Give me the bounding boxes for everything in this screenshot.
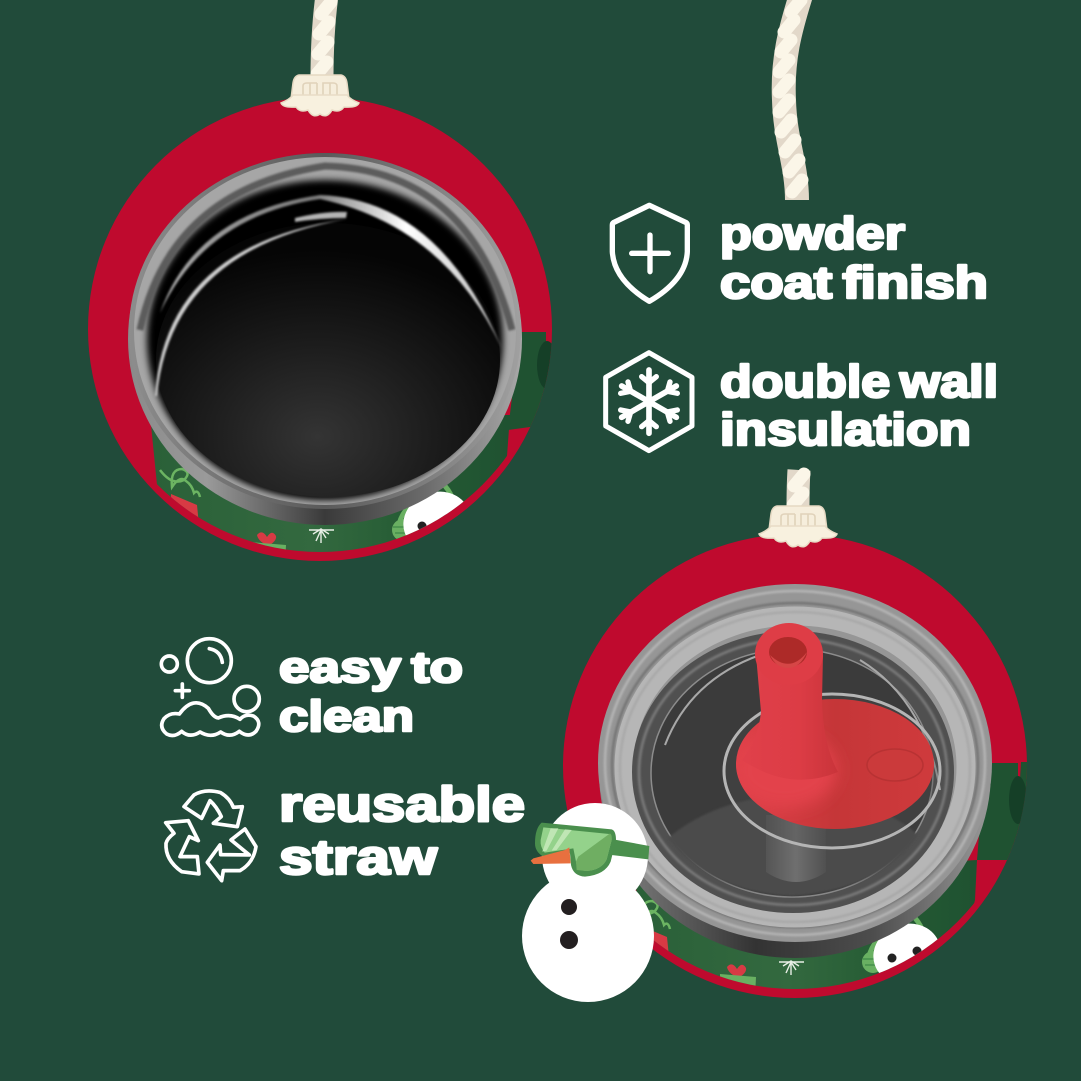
heading: easy to clean: clean: [279, 692, 414, 741]
ornament red ball: [88, 97, 552, 561]
snowman buttons: [560, 899, 578, 949]
heading: double wall insulation: [720, 356, 998, 455]
ornament: lid with red straw top view: [563, 534, 1030, 1011]
metal rim: [128, 153, 522, 525]
heading: powder coat finish: [720, 208, 988, 308]
heading: reusable straw: reusable: [279, 778, 525, 832]
clear ring around disc: [724, 694, 940, 848]
rope: left ornament: [317, 0, 331, 78]
clear lid ring: [598, 584, 992, 942]
feature: powder coat finish: [612, 205, 988, 308]
patterned green band: [636, 860, 977, 989]
heading: reusable straw: straw: [279, 831, 438, 885]
icon: recycle arrows: [166, 791, 256, 881]
patterned green band: [151, 415, 510, 552]
heading: easy to clean: [279, 643, 463, 741]
rope: right ornament: [793, 470, 804, 510]
tumbler handle: [977, 762, 1030, 860]
heading: double wall insulation: double wall: [720, 356, 998, 407]
feature: double wall insulation: [606, 353, 998, 455]
feature: easy to clean: [161, 639, 463, 741]
heading: powder coat finish: powder: [720, 208, 905, 259]
icon: shield with plus: [612, 205, 687, 301]
ornament red ball: [563, 534, 1027, 998]
ornament cap: left: [281, 75, 359, 116]
heading: double wall insulation: insulation: [720, 404, 971, 455]
tumbler handle: [508, 332, 552, 430]
heading: powder coat finish: coat finish: [720, 257, 988, 308]
metal rim: [599, 586, 991, 958]
feature: reusable straw: [166, 778, 525, 885]
icon: bubbles and foam: [161, 639, 259, 735]
snowman head: [542, 803, 648, 909]
ornament: open tumbler top view: [88, 97, 557, 579]
snowman body: [522, 870, 654, 1002]
red straw: [733, 623, 838, 808]
snowman goggles and nose: [531, 823, 649, 877]
heading: reusable straw: [279, 778, 525, 885]
disc small oval: [867, 749, 923, 781]
heading: easy to clean: easy to: [279, 643, 463, 692]
lid interior: [632, 631, 954, 913]
red disc: [736, 699, 934, 829]
rope: top right: [779, 0, 802, 200]
icon: hexagon snowflake: [606, 353, 692, 451]
snowman: [522, 803, 654, 1002]
straw under lid: [766, 815, 826, 882]
ornament cap: right: [759, 506, 837, 547]
tumbler interior: [155, 195, 502, 497]
